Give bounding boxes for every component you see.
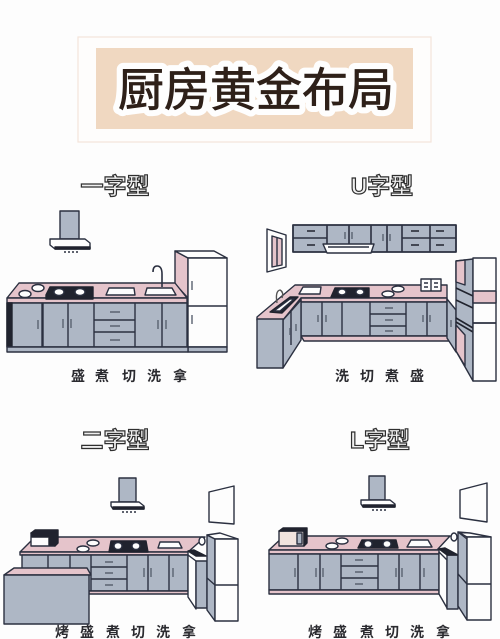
panel: U-shaped kitchen <box>257 173 496 384</box>
U base cabinets <box>257 299 456 368</box>
sequence label <box>55 624 196 639</box>
icon: window <box>460 483 487 522</box>
icon: range hood <box>361 476 395 510</box>
sequence label <box>71 368 187 384</box>
icon: tall fridge <box>456 258 496 381</box>
icon: window <box>209 486 234 524</box>
counter top <box>269 533 457 554</box>
icon: microwave <box>31 530 58 546</box>
icon: microwave <box>279 528 307 546</box>
icon: range hood <box>111 478 144 512</box>
heading: one-line: 一字型 <box>80 173 150 199</box>
sequence label: 拿 <box>173 368 187 384</box>
sequence label: 切 <box>122 368 136 384</box>
main title: 厨房黄金布局 <box>118 64 394 116</box>
sequence label: 盛 <box>71 368 85 384</box>
icon: fridge <box>175 251 227 352</box>
base cabinets <box>22 555 189 594</box>
title banner <box>78 37 431 142</box>
icon: range hood <box>50 211 90 252</box>
counter top <box>7 266 187 303</box>
icon: window <box>267 229 286 272</box>
inner panel <box>96 48 413 129</box>
sequence label: 洗 <box>335 368 349 384</box>
panel: L-shaped kitchen <box>269 427 491 639</box>
icon: fridge <box>458 532 491 620</box>
side cabinet <box>439 548 458 609</box>
base cabinets <box>7 303 188 352</box>
wall cabinets <box>293 225 456 253</box>
icon: hob <box>109 541 148 552</box>
sequence label: 煮 <box>95 368 109 384</box>
icon: recipe book <box>421 279 441 291</box>
panel: two-line kitchen <box>4 427 238 639</box>
outer frame <box>78 37 431 142</box>
heading: L-shape: L字型 <box>350 427 410 453</box>
sequence label: 煮 <box>385 368 399 384</box>
icon: fridge <box>207 533 238 621</box>
main title: 厨房黄金布局 <box>118 64 394 116</box>
heading: U-shape: U字型 <box>351 173 413 199</box>
base cabinets <box>269 554 439 594</box>
island counter <box>4 568 91 624</box>
icon: hob <box>358 540 398 548</box>
heading: two-line: 二字型 <box>80 427 150 453</box>
U counter <box>257 279 447 320</box>
sequence label: 盛 <box>410 368 424 384</box>
sequence label <box>335 368 424 384</box>
icon: hob <box>46 287 93 299</box>
counter top <box>20 537 205 555</box>
sequence label <box>308 624 450 639</box>
sequence label: 洗 <box>147 368 161 384</box>
panel: one-line kitchen <box>7 173 227 384</box>
sequence label: 切 <box>360 368 374 384</box>
icon: hob <box>331 288 369 297</box>
side cabinet <box>188 550 207 609</box>
